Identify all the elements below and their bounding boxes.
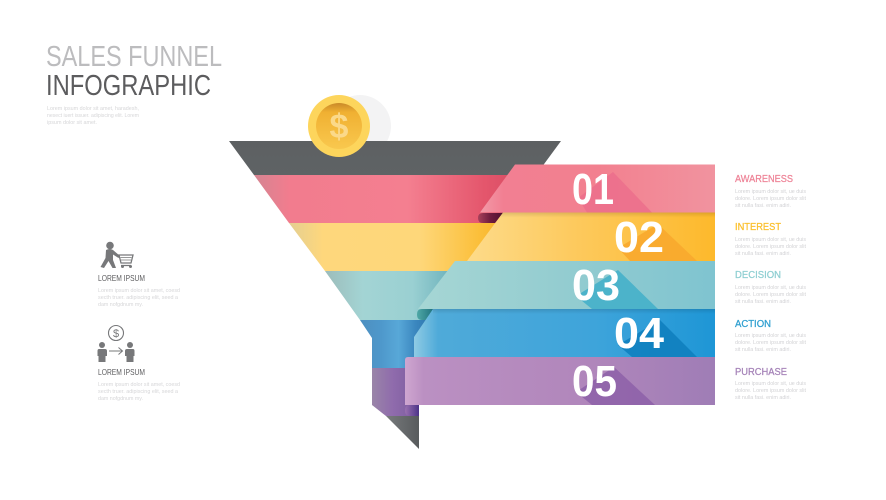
title: SALES FUNNEL [46,41,222,73]
label: interest: INTEREST [735,222,781,233]
icon: person with cart [100,242,133,268]
ribbon 03 fold [417,309,436,320]
intro text [47,106,139,126]
ribbon 02: 02 [614,213,664,262]
left heading and text 2: dam nofgdnum my. [98,396,143,402]
intro text: nesect iuert issuer. adipiscing elit. Lorem [47,113,139,119]
label: action: dolore. Lorem ipsum dolor slit [735,340,806,346]
label: action [735,319,806,353]
label: action: sit nulla fasi. enim adiri. [735,347,791,353]
label: purchase: sit nulla fasi. enim adiri. [735,395,791,401]
ribbon 05: 05 [572,357,617,406]
funnel [229,141,561,449]
left heading and text 2: Lorem ipsum dolor sit amet, coesd [98,382,180,388]
label: awareness: Lorem ipsum dolor sit, ue duis [735,189,806,195]
left heading and text 1: LOREM IPSUM [98,273,145,283]
label: decision: dolore. Lorem ipsum dolor slit [735,292,806,298]
label: decision [735,270,806,305]
ribbon 05 [405,357,715,406]
intro text: ipsum dolor sit amet. [47,120,97,126]
label: awareness: AWARENESS [735,174,793,185]
ribbon 04: 04 [614,309,665,358]
label: purchase: dolore. Lorem ipsum dolor slit [735,388,806,394]
label: decision: Lorem ipsum dolor sit, ue duis [735,285,806,291]
label: purchase: Lorem ipsum dolor sit, ue duis [735,381,806,387]
intro text: Lorem ipsum dolor sit amet, haradesh, [47,106,139,112]
label: decision: sit nulla fasi. enim adiri. [735,299,791,305]
icon: money transfer between people [98,326,134,362]
left heading and text 1: Lorem ipsum dolor sit amet, coesd [98,288,180,294]
label: action: Lorem ipsum dolor sit, ue duis [735,333,806,339]
left heading and text 1: secth truer. adipiscing elit, seed a [98,295,179,301]
ribbon 05 fold [405,405,419,416]
label: purchase: PURCHASE [735,367,787,378]
icon: gold coin [308,95,370,157]
left heading and text 2 [98,367,180,402]
icon: money transfer between people: $ [113,328,119,340]
ribbon 03 [418,261,715,310]
icon: coin shadow [329,95,391,157]
left heading and text 2: secth truer. adipiscing elit, seed a [98,389,179,395]
ribbon 02 [467,212,715,262]
label: awareness: sit nulla fasi. enim adiri. [735,203,791,209]
left heading and text 1: dam nofgdnum my. [98,302,143,308]
ribbon 04 [414,309,715,358]
label: interest: sit nulla fasi. enim adiri. [735,251,791,257]
ribbon 01 [480,164,715,214]
ribbon 01 fold [478,213,503,223]
label: decision: DECISION [735,270,781,281]
left heading and text 2: LOREM IPSUM [98,367,145,377]
label: purchase [735,367,806,401]
left heading and text 1 [98,273,180,308]
label: interest: dolore. Lorem ipsum dolor slit [735,244,806,250]
ribbon 01: 01 [572,165,614,214]
icon: gold coin: $ [330,108,349,146]
label: awareness: dolore. Lorem ipsum dolor slit [735,196,806,202]
label: awareness [735,174,806,209]
ribbon 03: 03 [572,261,620,310]
title: INFOGRAPHIC [46,70,211,102]
label: interest: Lorem ipsum dolor sit, ue duis [735,237,806,243]
title [46,41,222,102]
label: action: ACTION [735,319,771,330]
label: interest [735,222,806,257]
